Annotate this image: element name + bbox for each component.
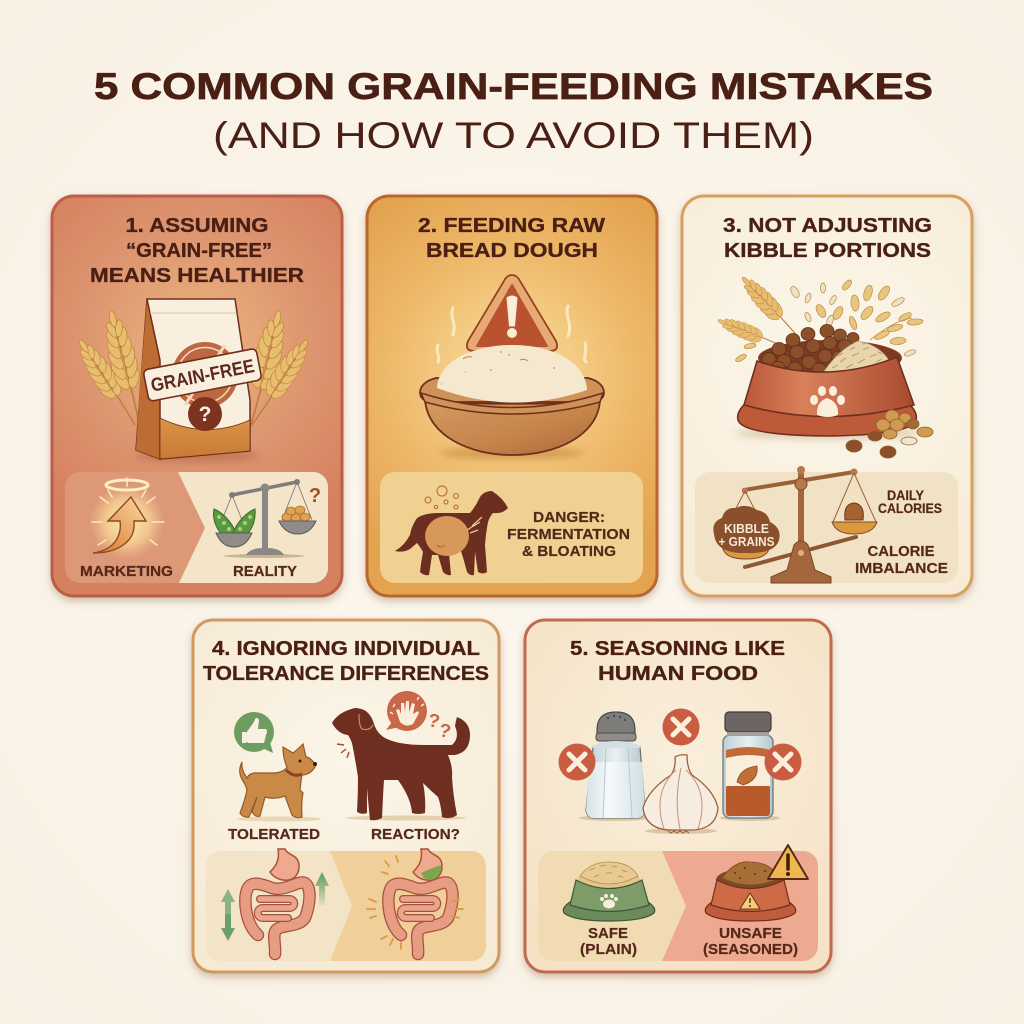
title: 5 COMMON GRAIN-FEEDING MISTAKES: [94, 65, 933, 107]
title: [94, 65, 933, 156]
heading: mistake 3: [723, 215, 932, 262]
icon: wheat and scattered grains: [714, 270, 923, 363]
heading: mistake 1: “GRAIN-FREE”: [126, 240, 272, 262]
icon: warning triangle: [768, 845, 808, 879]
label: reality: REALITY: [233, 563, 297, 580]
icon: calorie scale: + GRAINS: [718, 535, 774, 549]
icon: balance scale: ?: [309, 485, 321, 507]
icon: question marks: [426, 710, 452, 743]
panel: mistake 3 kibble portions: [682, 196, 972, 596]
icon: grain-free bag: [135, 299, 262, 462]
label: daily calories: DAILY: [887, 488, 924, 503]
icon: dough in bowl: [420, 345, 604, 459]
icon: healthy gut: [245, 849, 310, 954]
comparison strip: gut response: [206, 849, 486, 961]
label: unsafe seasoned: [703, 925, 798, 958]
heading: mistake 5: [570, 638, 785, 685]
label: safe plain: (PLAIN): [580, 941, 637, 958]
heading: mistake 4: 4. IGNORING INDIVIDUAL: [212, 638, 480, 660]
label: calorie imbalance: IMBALANCE: [855, 560, 948, 577]
heading: mistake 3: KIBBLE PORTIONS: [724, 240, 931, 262]
heading: mistake 2: [418, 215, 605, 262]
label: safe plain: SAFE: [588, 925, 628, 942]
heading: mistake 2: BREAD DOUGH: [426, 240, 598, 262]
heading: mistake 4: [203, 638, 489, 685]
icon: thumbs-up bubble: [234, 712, 274, 753]
label: reaction: REACTION?: [371, 826, 460, 843]
icon: dog bowl with kibble and rice: [735, 324, 933, 458]
label: marketing: MARKETING: [80, 563, 173, 580]
heading: mistake 5: 5. SEASONING LIKE: [570, 638, 785, 660]
icon: calorie scale: [713, 466, 877, 583]
comparison strip: safe vs unsafe: [538, 845, 818, 961]
label: unsafe seasoned: UNSAFE: [719, 925, 782, 942]
label: safe plain: [580, 925, 637, 958]
label: calorie imbalance: CALORIE: [868, 543, 934, 560]
icon: garlic bulb: [643, 755, 718, 834]
label: daily calories: [878, 488, 942, 516]
panel: mistake 4 individual tolerance: [193, 620, 499, 972]
label: danger: [507, 509, 630, 560]
panel: mistake 1 grain-free: [52, 196, 342, 596]
heading: mistake 1: 1. ASSUMING: [126, 215, 268, 237]
heading: mistake 3: 3. NOT ADJUSTING: [723, 215, 932, 237]
panel: mistake 5 human seasoning: [525, 620, 831, 972]
label: daily calories: CALORIES: [878, 501, 942, 516]
label: danger: FERMENTATION: [507, 526, 630, 543]
icon: green movement arrows: [221, 872, 329, 941]
icon: irritated gut: [367, 849, 463, 954]
comparison strip: marketing vs reality: [65, 472, 328, 583]
icon: calorie scale: KIBBLE: [724, 522, 769, 536]
icon: dog with bloated stomach: [395, 486, 508, 575]
label: calorie imbalance: [855, 543, 948, 577]
comparison strip: calorie imbalance: [695, 466, 958, 583]
icon: unsafe red bowl: [705, 862, 796, 921]
icon: reaction bubble: [386, 691, 427, 731]
icon: balance scale: [213, 479, 321, 558]
icon: safe green bowl: [563, 862, 655, 921]
icon: paw print: [810, 386, 845, 417]
label: danger: & BLOATING: [522, 543, 616, 560]
icon: salt shaker: [579, 712, 651, 821]
heading: mistake 1: MEANS HEALTHIER: [90, 265, 305, 287]
heading: mistake 5: HUMAN FOOD: [598, 663, 758, 685]
icon: question marks: ?: [426, 710, 441, 733]
heading: mistake 1: [90, 215, 305, 287]
label: danger: DANGER:: [533, 509, 605, 526]
icon: large brown dog: [332, 708, 470, 820]
label: unsafe seasoned: (SEASONED): [703, 941, 798, 958]
heading: mistake 2: 2. FEEDING RAW: [418, 215, 605, 237]
heading: mistake 4: TOLERANCE DIFFERENCES: [203, 663, 489, 685]
label: grain-free tag: GRAIN-FREE: [149, 356, 256, 397]
title: (AND HOW TO AVOID THEM): [213, 115, 814, 156]
decoration: steam: [437, 306, 586, 362]
icon: question marks: ?: [437, 720, 452, 743]
icon: spice jar: [720, 712, 780, 821]
callout strip: fermentation danger: [380, 472, 643, 583]
icon: wheat stalks: [69, 307, 318, 432]
panel: mistake 2 raw bread dough: [367, 196, 657, 596]
label: tolerated: TOLERATED: [228, 826, 320, 843]
icon: grain-free bag: ?: [199, 403, 211, 426]
icon: three no-symbols: [558, 708, 802, 780]
icon: glowing arrow with halo: [89, 478, 165, 560]
icon: small tan dog: [237, 744, 321, 822]
icon: warning triangle: [467, 275, 557, 351]
